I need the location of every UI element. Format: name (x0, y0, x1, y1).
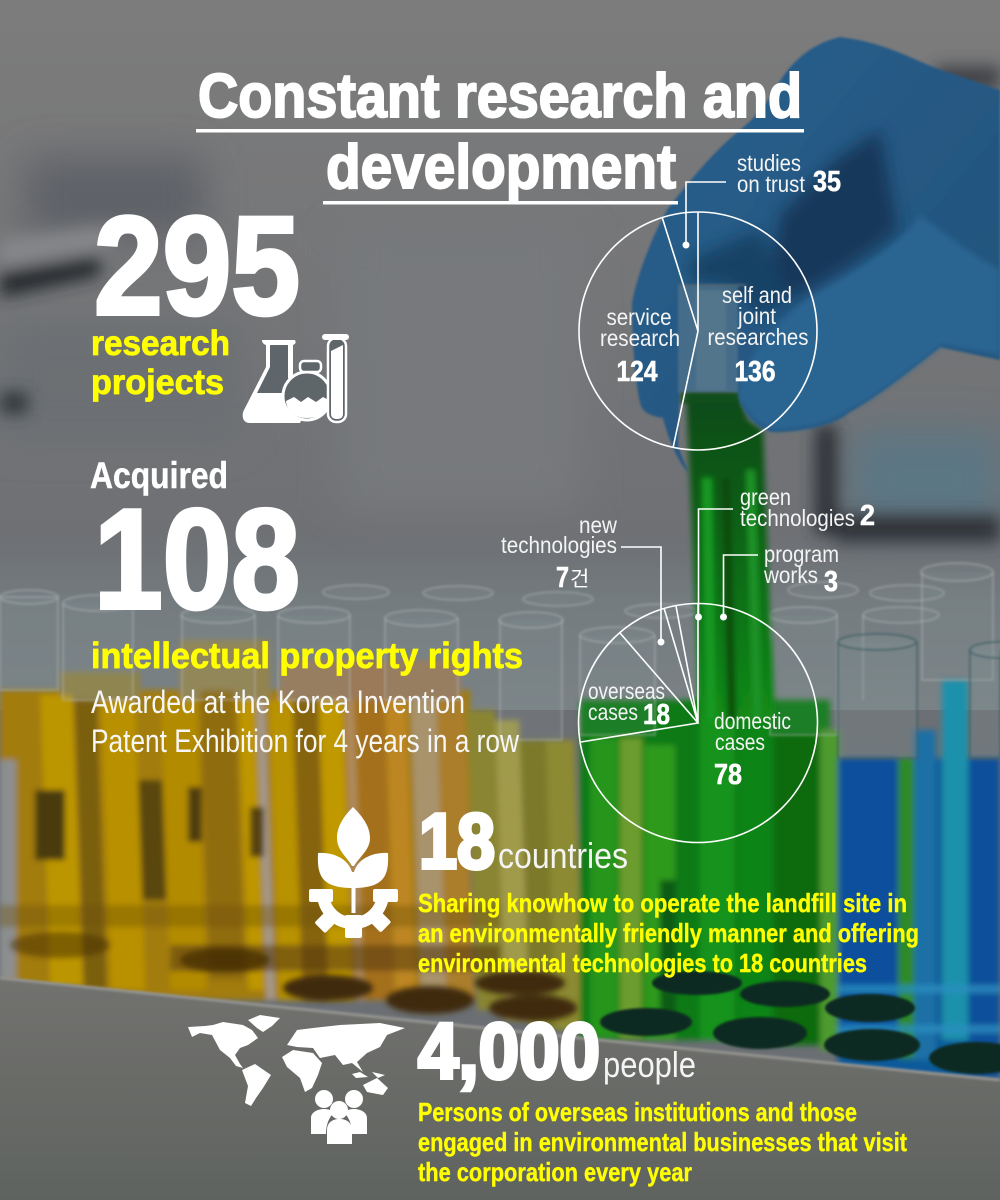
stat: 295 research projects: research (91, 324, 230, 363)
stat: 4,000 people (418, 1006, 907, 1187)
label: overseas cases 18: overseas (588, 678, 665, 704)
tube rack holes (10, 932, 577, 1021)
callout: green technologies 2: green (740, 484, 791, 510)
stat: 295 research projects: 295 (94, 187, 300, 344)
callout: green technologies 2: technologies (740, 505, 855, 531)
stat: 4,000 people: Persons of overseas institutions and those (418, 1097, 857, 1127)
test tube glass top (678, 284, 746, 404)
label: self and joint researches 136 (708, 282, 808, 388)
title (196, 62, 804, 204)
callout: program works 3: program (764, 541, 839, 567)
title: development (326, 133, 676, 202)
label: domestic cases 78: 78 (714, 759, 742, 791)
stat: 18 countries: Sharing knowhow to operate the landfill site in (418, 888, 907, 918)
green tube held by hand (686, 392, 775, 720)
green tubes (580, 700, 830, 1040)
callout: studies on trust 35: 35 (813, 166, 841, 198)
label: self and joint researches 136: 136 (734, 356, 776, 388)
icon: plant growing from gear (309, 807, 398, 938)
stat: 295 research projects (91, 187, 300, 402)
callout: new technologies 7: 건 (570, 568, 589, 591)
glass tube rims (0, 563, 993, 740)
label: service research 124 (600, 304, 680, 388)
callout: new technologies 7: technologies (501, 532, 617, 558)
label: overseas cases 18 (588, 678, 670, 731)
stat: 4,000 people: engaged in environmental businesses that visit (418, 1127, 907, 1157)
label: self and joint researches 136: joint (737, 303, 777, 329)
stat: 18 countries: countries (498, 835, 628, 876)
stat: 18 countries (418, 797, 919, 978)
label: overseas cases 18: cases (588, 699, 638, 725)
label: service research 124: research (600, 325, 680, 351)
stat: 4,000 people: people (603, 1044, 696, 1085)
stat: 4,000 people: 4,000 (418, 1006, 600, 1095)
icon: flask, round flask and test tube (243, 334, 349, 423)
bench floor (0, 978, 1000, 1200)
stat: 18 countries: an environmentally friendly manner and offering (418, 918, 919, 948)
stat: 18 countries: environmental technologies to 18 countries (418, 948, 867, 978)
label: service research 124: 124 (616, 356, 658, 388)
stat: acquired 108 intellectual property rights: 108 (94, 480, 300, 639)
label: domestic cases 78: cases (715, 729, 765, 755)
stat: 295 research projects: projects (91, 363, 224, 402)
label: self and joint researches 136: self and (722, 282, 792, 308)
stat: acquired 108 intellectual property rights: Patent Exhibition for 4 years in a row (91, 723, 520, 759)
blue tubes (838, 758, 1000, 1078)
label: overseas cases 18: 18 (643, 699, 670, 731)
stat: acquired 108 intellectual property rights: Awarded at the Korea Invention (91, 684, 465, 720)
callout: studies on trust 35 (682, 150, 841, 248)
label: service research 124: service (606, 304, 672, 330)
icon: world map with people (188, 1015, 405, 1144)
blue glove hand (632, 37, 1000, 472)
label: domestic cases 78: domestic (714, 708, 791, 734)
stat: 4,000 people: the corporation every year (418, 1157, 692, 1187)
callout: studies on trust 35: on trust (737, 171, 806, 197)
callout: new technologies 7 (501, 512, 664, 646)
label: self and joint researches 136: researches (708, 324, 808, 350)
callout: new technologies 7: new (579, 512, 617, 538)
callout: green technologies 2 (695, 484, 875, 620)
amber tubes (0, 640, 1000, 1078)
title: Constant research and (198, 62, 802, 131)
stat: acquired 108 intellectual property rights: Acquired (90, 455, 228, 496)
callout: program works 3 (720, 541, 839, 620)
callout: program works 3: works (763, 562, 818, 588)
glass tube section behind liquids (0, 530, 1000, 710)
callout: new technologies 7: 7 (556, 562, 569, 594)
callout: green technologies 2: 2 (860, 500, 875, 532)
callout: program works 3: 3 (824, 566, 838, 598)
pie chart: intellectual property by type (501, 484, 875, 842)
stat: acquired 108 intellectual property rights (90, 455, 523, 759)
callout: studies on trust 35: studies (737, 150, 801, 176)
stat: 18 countries: 18 (419, 797, 495, 885)
label: domestic cases 78 (714, 708, 791, 791)
stat: acquired 108 intellectual property rights: intellectual property rights (91, 635, 523, 676)
pie chart: research projects by type (579, 150, 841, 450)
